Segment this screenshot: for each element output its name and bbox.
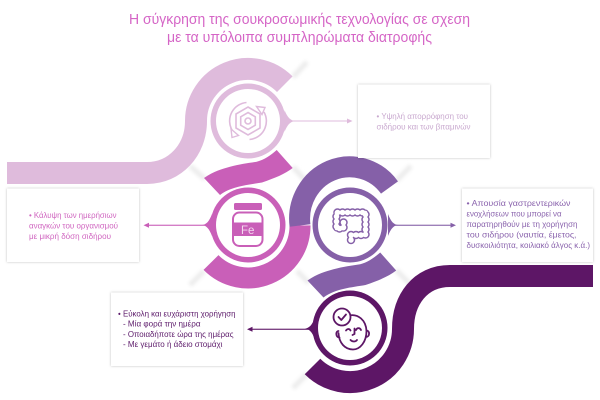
arrow: to high absorption — [290, 118, 352, 124]
box: daily needs: αναγκών του οργανισμού — [29, 222, 118, 230]
band: purple connector — [308, 252, 396, 298]
box: high absorption: • Υψηλή απορρόφηση του — [376, 112, 468, 121]
box: high absorption: σιδήρου και των βιταμινών — [376, 122, 470, 132]
band: dark ribbon — [312, 276, 593, 382]
box: no gastrointestinal discomfort — [462, 188, 593, 262]
box: no gastrointestinal discomfort: του σιδήρου (ναυτία, έμετος, — [466, 230, 576, 240]
box: easy administration — [111, 292, 243, 366]
box: easy administration: • Εύκολη και ευχάριστη χορήγηση — [118, 310, 236, 318]
box: easy administration: - Με γεμάτο ή άδειο στομάχι — [123, 340, 223, 349]
icon node: happy face — [305, 290, 388, 366]
box: no gastrointestinal discomfort: παρατηρηθούν με τη χορήγηση — [466, 220, 578, 229]
title: Η σύγκρηση της σουκροσωμικής τεχνολογίας σε σχεση — [129, 11, 470, 28]
box: daily needs — [7, 188, 139, 262]
box: daily needs: με μικρή δόση σιδήρου — [29, 232, 111, 241]
arrow: to daily needs — [144, 223, 206, 228]
icon node: iron jar — [202, 188, 286, 262]
arrow: to no discomfort — [394, 223, 456, 228]
box: daily needs: • Κάλυψη των ημερήσιων — [29, 211, 116, 220]
title: με τα υπόλοιπα συμπληρώματα διατροφής — [167, 29, 432, 46]
band: magenta connector — [204, 150, 293, 195]
band: light ribbon — [7, 69, 285, 173]
band: magenta arc — [211, 226, 300, 278]
box: easy administration: - Μία φορά την ημέρα — [123, 320, 201, 328]
box: no gastrointestinal discomfort: δυσκοιλιότητα, κοιλιακό άλγος κ.ά.) — [466, 241, 590, 250]
title — [129, 11, 470, 46]
box: no gastrointestinal discomfort: • Απουσία γαστρεντερικών — [466, 199, 570, 208]
band: purple arc — [300, 167, 390, 226]
box: easy administration: - Οποιαδήποτε ώρα της ημέρας — [123, 330, 234, 339]
box: no gastrointestinal discomfort: ενοχλήσεων που μπορεί να — [466, 210, 562, 218]
icon node: absorption — [210, 84, 295, 158]
icon node: intestine — [312, 188, 398, 262]
icon node: iron jar: Fe — [241, 225, 254, 237]
arrow: to easy administration — [247, 327, 310, 332]
box: high absorption — [358, 84, 490, 158]
